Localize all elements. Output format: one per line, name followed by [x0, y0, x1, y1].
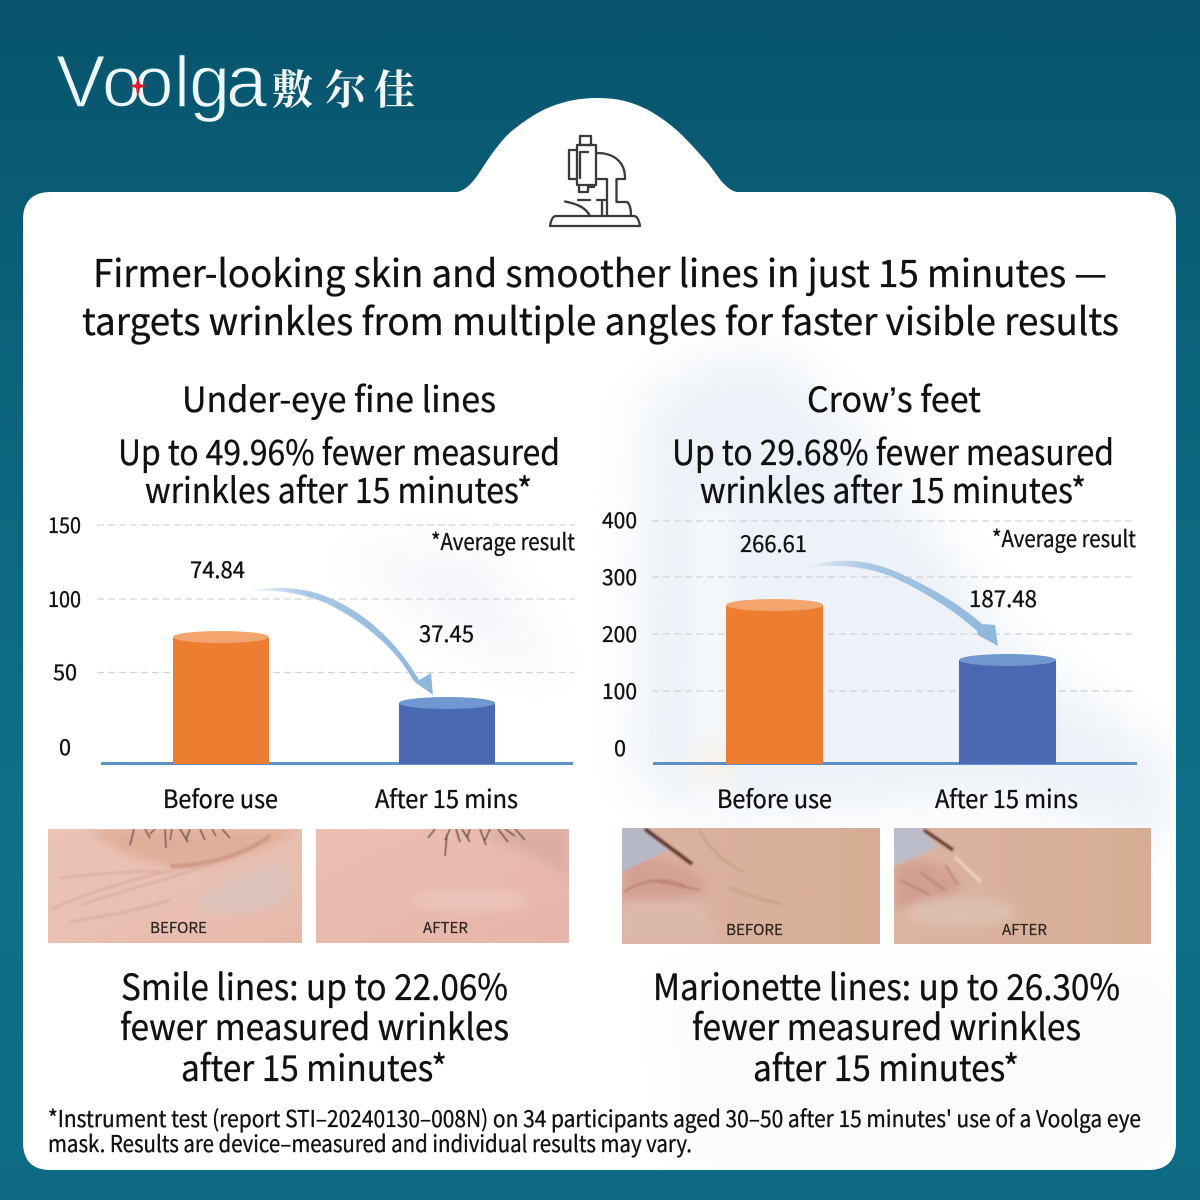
bar chart: under-eye fine lines: 100 — [48, 582, 81, 614]
panel: crow's feet heading: wrinkles after 15 minutes* — [700, 463, 1086, 514]
brand logo: 敷尔佳 — [272, 57, 415, 116]
panel: under-eye fine lines heading — [118, 372, 560, 514]
panel: under-eye fine lines heading: wrinkles after 15 minutes* — [145, 463, 532, 514]
bar chart: under-eye fine lines: 74.84 — [190, 551, 245, 585]
bar chart: crow's feet: 200 — [602, 617, 637, 649]
panel: crow's feet heading — [672, 372, 1114, 514]
photo: crow's feet before: BEFORE — [726, 919, 783, 940]
bar chart: crow's feet: 0 — [614, 731, 626, 763]
bar chart: crow's feet: 266.61 — [740, 525, 807, 559]
bar chart: crow's feet: 187.48 — [969, 580, 1037, 614]
bar chart: under-eye fine lines: 0 — [59, 730, 71, 762]
brand logo — [56, 40, 415, 123]
photo: crow's feet after: AFTER — [1002, 919, 1047, 940]
title: targets wrinkles from multiple angles for faster visible results — [82, 291, 1119, 346]
bar chart: crow's feet: 100 — [602, 674, 637, 706]
smile lines text — [120, 959, 509, 1092]
smile lines text: after 15 minutes* — [181, 1040, 447, 1092]
panel: under-eye fine lines heading: Under-eye fine lines — [182, 372, 496, 423]
photo: under-eye after — [316, 829, 569, 943]
photo: crow's feet after — [894, 828, 1151, 944]
bar chart: crow's feet — [602, 503, 1137, 816]
brand logo: o — [134, 44, 174, 122]
brand logo: o — [102, 44, 142, 122]
marionette lines text: fewer measured wrinkles — [692, 999, 1081, 1051]
photo: crow's feet before — [622, 828, 880, 944]
photo: under-eye before — [48, 829, 302, 943]
brand logo: a — [226, 40, 268, 123]
bar chart: crow's feet: *Average result — [992, 520, 1136, 554]
panel: crow's feet heading: Crow’s feet — [807, 372, 981, 423]
smile lines text: Smile lines: up to 22.06% — [121, 959, 508, 1011]
bar chart: under-eye fine lines: 37.45 — [419, 615, 474, 649]
brand logo: g — [189, 40, 230, 123]
smile lines text: fewer measured wrinkles — [120, 999, 509, 1051]
bar chart: under-eye fine lines — [48, 508, 575, 816]
brand logo: V — [56, 40, 106, 123]
marionette lines text: Marionette lines: up to 26.30% — [653, 959, 1120, 1011]
bar chart: crow's feet: 400 — [602, 503, 637, 535]
marionette lines text: after 15 minutes* — [753, 1040, 1019, 1092]
footnote: mask. Results are device–measured and individual results may vary. — [48, 1125, 692, 1159]
bar chart: crow's feet: Before use — [717, 780, 832, 816]
title: Firmer-looking skin and smoother lines in just 15 minutes — — [93, 243, 1107, 298]
panel: crow's feet heading: Up to 29.68% fewer measured — [672, 425, 1114, 476]
bar chart: under-eye fine lines: Before use — [163, 780, 278, 816]
title — [82, 243, 1119, 346]
bar chart: under-eye fine lines: After 15 mins — [375, 780, 518, 816]
footnote — [48, 1100, 1141, 1159]
bar chart: under-eye fine lines: *Average result — [431, 523, 575, 557]
bar chart: under-eye fine lines: 50 — [53, 655, 77, 687]
photo: under-eye after: AFTER — [423, 917, 468, 938]
bar chart: crow's feet: After 15 mins — [935, 780, 1078, 816]
marionette lines text — [653, 959, 1120, 1092]
brand logo: l — [174, 43, 190, 123]
panel: under-eye fine lines heading: Up to 49.96% fewer measured — [118, 425, 560, 476]
icon: microscope — [550, 136, 640, 226]
bar chart: crow's feet: 300 — [602, 560, 637, 592]
photo: under-eye before: BEFORE — [150, 917, 207, 938]
bar chart: under-eye fine lines: 150 — [48, 508, 81, 540]
